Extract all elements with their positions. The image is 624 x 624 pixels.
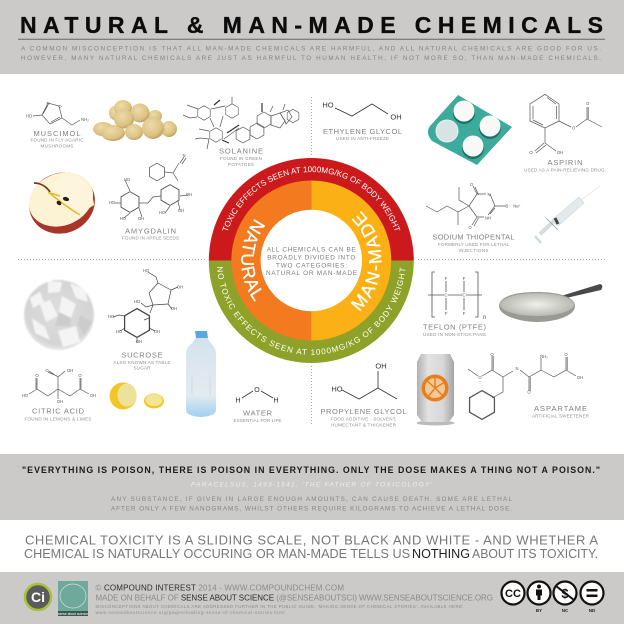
sodium thiopental: O [468,225,472,230]
solanine: SOLANINE [219,146,263,156]
citric acid: HO [22,393,29,398]
logo: sense about science: sense about science [58,612,88,616]
sodium thiopental: NH [485,216,491,220]
quote: "EVERYTHING IS POISON, THERE IS POISON IN EVERYTHING. ONLY THE DOSE MAKES A THING NOT A POISON." [22,465,600,475]
amygdalin: HO [124,177,131,182]
centre text [266,246,357,277]
sucrose: OH [171,306,177,311]
photo: frying pan [499,284,602,322]
water: H [235,398,241,404]
conclusion: CHEMICAL TOXICITY IS A SLIDING SCALE, NOT BLACK AND WHITE - AND WHETHER A [25,532,598,548]
header band [0,0,624,74]
photo: syringe [535,186,600,243]
photo: potatoes [93,100,177,141]
logo: compound interest [25,584,51,610]
photo: lemons [110,382,164,410]
photo: water bottle [186,331,216,417]
sodium thiopental: S⁻ [505,204,511,208]
teflon: C [444,292,448,298]
centre text: BROADLY DIVIDED INTO [267,254,355,262]
water: H [273,398,279,404]
ethylene glycol: ETHYLENE GLYCOL [323,127,402,136]
solanine: POTATOES [228,162,254,167]
conclusion: ABOUT ITS TOXICITY. [472,546,598,561]
sodium thiopental: INJECTIONS [458,248,488,253]
licence icons: CC [505,588,521,600]
credits [96,584,493,615]
natural label: NATURAL [241,219,266,302]
aspartame: N [515,366,519,371]
citric acid: O [45,368,49,373]
credits: MISCONCEPTIONS ABOUT CHEMICALS ARE ADDRESSED FURTHER IN THE PUBLIC GUIDE, 'MAKING SENSE OF CHEMICAL STORIES', AVAILABLE HERE: [96,604,463,609]
photo: drinks can [416,354,454,426]
teflon: F [463,276,466,281]
sucrose: OH [177,284,183,290]
outer ring: green non-toxic half [209,260,414,363]
aspirin [524,94,606,172]
citric acid: FOUND IN LEMONS & LIMES [24,416,92,422]
propylene glycol [320,362,406,428]
sucrose: OH [136,339,142,344]
attribution: PARACELSUS, 1493-1541, 'THE FATHER OF TOXICOLOGY' [191,482,433,488]
sodium thiopental: Na⁺ [513,204,521,208]
aspirin: O [572,126,576,130]
water [234,387,282,423]
sucrose: SUCROSE [122,350,162,360]
ethylene glycol [322,100,402,141]
propylene glycol: PROPYLENE GLYCOL [320,407,406,416]
sodium thiopental: FORMERLY USED FOR LETHAL [438,242,509,247]
muscimol: O [58,104,62,109]
muscimol: FOUND IN FLY AGARIC [30,138,84,142]
teflon: F [463,311,466,316]
logo: compound interest: Ci [31,589,45,605]
aspirin: OH [557,150,563,155]
propylene glycol: HO [331,384,343,394]
conclusion: NOTHING [412,546,470,561]
explanation [111,496,512,512]
credits: MADE ON BEHALF OF SENSE ABOUT SCIENCE (@SENSEABOUTSCI) WWW.SENSEABOUTSCIENCE.ORG [96,594,493,602]
intro text: A COMMON MISCONCEPTION IS THAT ALL MAN-MADE CHEMICALS ARE HARMFUL, AND ALL NATURAL CHEMICALS ARE GOOD FOR US. [21,46,601,52]
muscimol: MUSCIMOL [34,129,80,138]
aspartame: O [490,352,494,357]
logo: sense about science [58,581,88,616]
sugar cubes photo [24,280,94,350]
ethylene glycol: OH [390,112,402,122]
sucrose: OH [154,329,160,334]
aspirin: USED AS A PAIN-RELIEVING DRUG. [524,168,606,172]
aspirin: O [529,150,533,155]
water: O [254,387,260,394]
water: ESSENTIAL FOR LIFE [234,418,282,423]
conclusion: CHEMICAL IS NATURALLY OCCURING OR MAN-MADE TELLS US [24,546,410,561]
sodium thiopental: N [487,192,491,197]
propylene glycol: FOOD ADDITIVE - SOLVENT, [330,416,396,422]
amygdalin: HO [159,210,166,215]
licence icons [502,582,604,613]
solanine [183,97,299,167]
muscimol: N [46,101,50,106]
aspartame: O [478,375,482,380]
photo: blister pack of pills [428,95,512,165]
aspartame: OH [577,375,583,380]
non-toxic label: NO TOXIC EFFECTS SEEN AT 1000MG/KG OF BODY WEIGHT [217,266,406,355]
teflon: USED IN NON-STICK PANS [423,332,486,337]
explanation: AFTER ONLY A FEW NANOGRAMS, WHILST OTHERS REQUIRE KILOGRAMS TO ACHIEVE A LETHAL DOSE. [111,506,512,512]
muscimol [26,101,89,148]
teflon: F [445,276,448,281]
middle ring: natural half [231,180,311,340]
sodium thiopental [426,182,521,253]
amygdalin: FOUND IN APPLE SEEDS [122,236,179,240]
water: WATER [243,408,273,418]
sucrose: HO [134,299,141,304]
intro text: HOWEVER, MANY NATURAL CHEMICALS ARE JUST AS HARMFUL TO HUMAN HEALTH, IF NOT MORE SO, THAN MAN-MADE CHEMICALS. [21,55,601,62]
citric acid: O [35,373,39,378]
title: NATURAL & MAN-MADE CHEMICALS [20,12,603,38]
muscimol: MUSHROOMS [40,144,74,148]
centre text: NATURAL OR MAN-MADE [266,270,357,277]
sucrose: HO [143,268,150,273]
muscimol: HO [26,114,33,118]
teflon: C [462,292,466,298]
propylene glycol: HUMECTANT & THICKENER [331,422,397,428]
ethylene glycol: HO [322,100,334,110]
sucrose: ALSO KNOWN AS TABLE [114,360,170,365]
sodium thiopental: SODIUM THIOPENTAL [432,232,514,242]
man-made label: MAN-MADE [350,211,382,312]
sodium thiopental: O [470,182,474,187]
central ring diagram [208,158,414,363]
licence icons: BY [536,608,542,613]
teflon: n [483,315,486,321]
footer band [0,572,624,624]
propylene glycol: OH [375,362,387,370]
solanine: FOUND IN GREEN [220,156,262,161]
citric acid: OH [57,399,63,404]
licence icons: ND [589,608,596,613]
sucrose [108,268,183,370]
licence icons: $ [561,586,569,601]
teflon: TEFLON (PTFE) [423,322,486,332]
aspartame: ARTIFICIAL SWEETENER [532,414,590,418]
amygdalin: OH [186,192,192,197]
citric acid: O [78,373,82,378]
teflon: F [445,311,448,316]
aspartame: ASPARTAME [534,404,587,413]
conclusion [24,532,598,561]
middle ring: man-made half [311,180,391,340]
centre text: TWO CATEGORIES: [276,262,347,269]
amygdalin: N [182,153,186,158]
amygdalin: HO [109,200,116,205]
photo: apple [19,162,105,244]
centre text: ALL CHEMICALS CAN BE [267,246,356,254]
intro text [21,46,601,62]
credits: © COMPOUND INTEREST 2014 - WWW.COMPOUNDCHEM.COM [96,584,344,592]
licence icons: NC [562,608,569,613]
aspartame [468,352,590,419]
amygdalin: OH [138,216,144,221]
teflon [423,272,486,337]
credits: www.senseaboutscience.org/pages/making-sense-of-chemical-stories.html [96,610,285,615]
outer ring: red toxic half [209,158,414,260]
amygdalin: AMYGDALIN [125,226,176,236]
amygdalin: OH [178,208,184,213]
aspirin: ASPIRIN [548,158,582,167]
amygdalin [109,153,192,240]
ethylene glycol: USED IN ANTI-FREEZE [336,136,389,141]
amygdalin: HO [120,216,127,221]
citric acid: OH [67,368,73,373]
muscimol: NH₂ [81,117,89,122]
sucrose: HO [116,329,123,334]
sucrose: HO [108,314,115,319]
aspirin: O [586,101,590,106]
explanation: ANY SUBSTANCE, IF GIVEN IN LARGE ENOUGH AMOUNTS, CAN CAUSE DEATH. SOME ARE LETHAL [111,496,512,503]
aspartame: O [527,390,531,394]
aspartame: NH₂ [540,354,548,359]
aspartame: O [564,352,568,357]
citric acid [22,368,96,422]
citric acid: OH [90,393,96,398]
sucrose: SUGAR [134,366,151,370]
citric acid: CITRIC ACID [32,406,85,416]
toxic label: TOXIC EFFECTS SEEN AT 1000MG/KG OF BODY WEIGHT [222,166,400,230]
quote band [0,454,624,520]
